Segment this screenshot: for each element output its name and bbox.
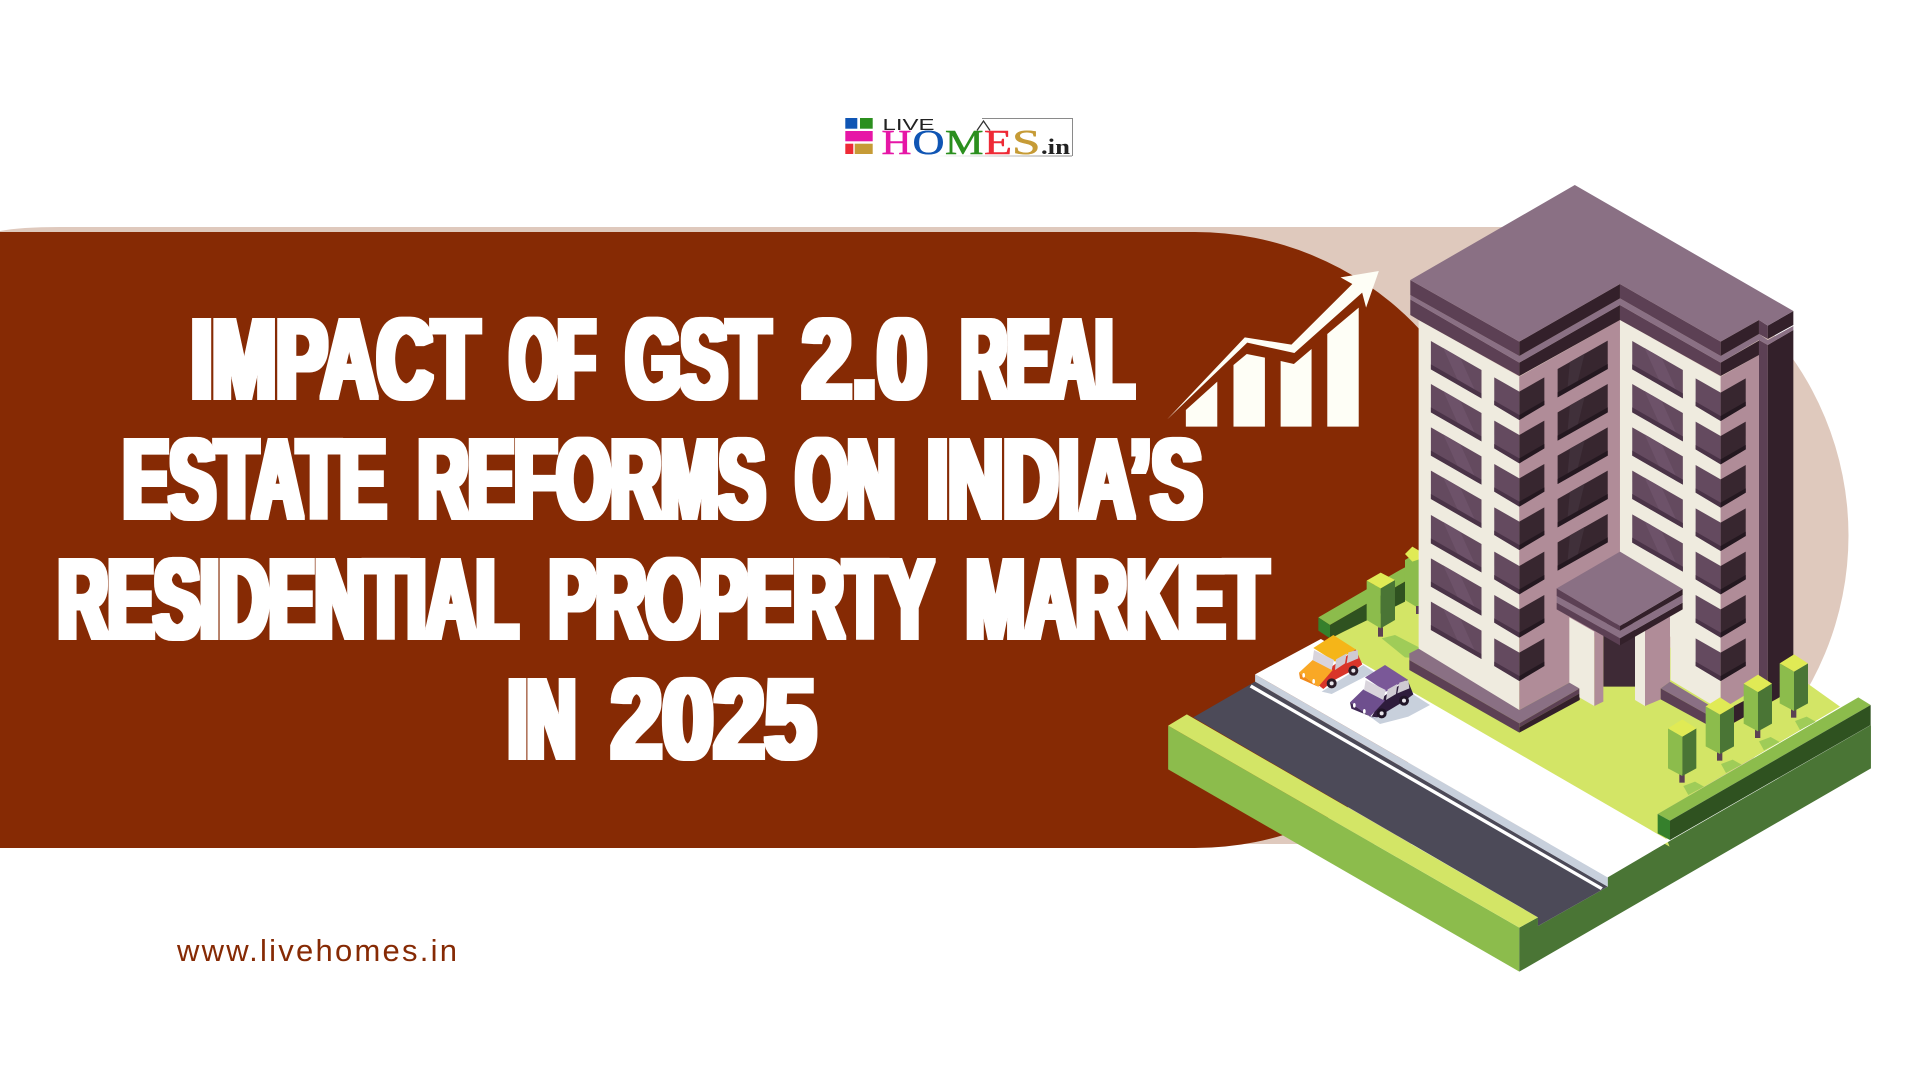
logo: Live Homes: S (1012, 123, 1040, 162)
logo: Live Homes: LIVE (882, 117, 934, 134)
title: PROPERTY (549, 536, 933, 662)
title: GST (626, 296, 770, 422)
entrance canopy, columns, right plinth and front trees (1557, 552, 1871, 840)
icon: rising bar chart with arrow (1167, 271, 1379, 427)
illustration: isometric building on green plot (1168, 185, 1871, 972)
windows (1431, 341, 1746, 681)
title: 2025 (611, 656, 816, 782)
orange car (1299, 635, 1374, 694)
title: IMPACT (191, 296, 479, 422)
website url: www.livehomes.in (176, 933, 457, 968)
back hedge and back trees (1318, 547, 1419, 658)
title: ESTATE (123, 416, 386, 542)
logo: Live Homes: E (984, 123, 1012, 162)
title: MARKET (966, 536, 1268, 662)
title: RESIDENTIAL (58, 536, 518, 662)
title: 2.0 (802, 296, 927, 422)
title: REAL (961, 296, 1134, 422)
canopy (1557, 552, 1683, 645)
title: INDIA’S (927, 416, 1202, 542)
title: REFORMS (418, 416, 765, 542)
ground plot (1168, 590, 1871, 972)
tree 1 (1668, 719, 1704, 795)
logo: Live Homes: H (882, 123, 912, 162)
title: IN (508, 656, 576, 782)
front hedge (1658, 697, 1871, 840)
title: ON (796, 416, 895, 542)
building tower (1409, 185, 1793, 733)
logo: Live Homes (845, 117, 1072, 162)
logo: Live Homes: .in (1041, 134, 1070, 159)
cars (1299, 635, 1430, 724)
tree 2 (1706, 697, 1742, 773)
title: OF (510, 296, 595, 422)
logo: Live Homes: M (945, 123, 984, 162)
purple car (1350, 665, 1430, 724)
door (1603, 623, 1635, 687)
right plinth (1661, 682, 1781, 732)
tree 4 (1780, 654, 1816, 730)
panel: brown title banner (0, 232, 1503, 848)
panel: beige backdrop shape (0, 227, 1848, 844)
tree 3 (1744, 675, 1780, 750)
logo: Live Homes: O (912, 123, 944, 162)
right column (1635, 617, 1670, 706)
left plinth (1409, 649, 1580, 733)
left column (1569, 617, 1603, 706)
title (58, 296, 1268, 782)
roof (1410, 185, 1793, 376)
